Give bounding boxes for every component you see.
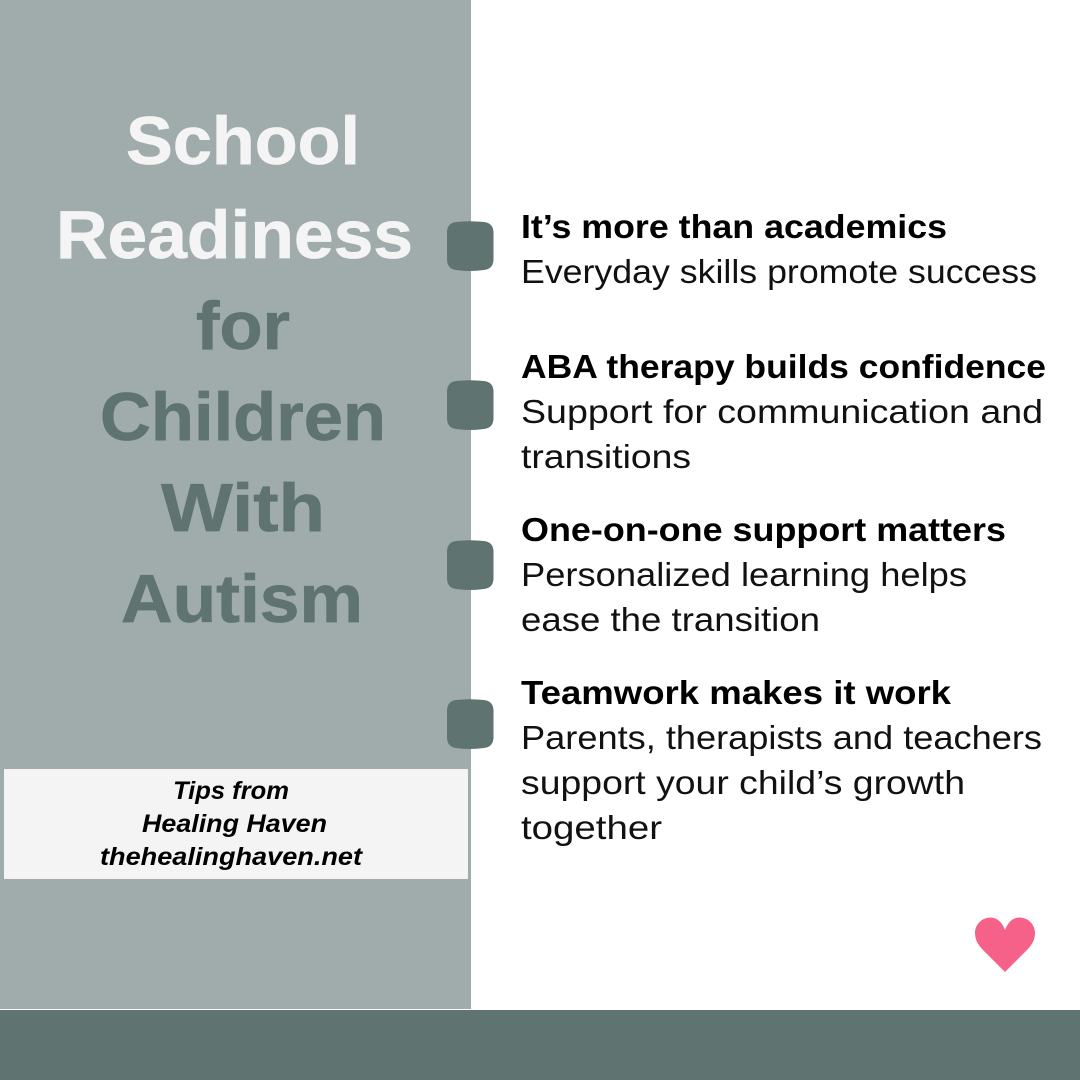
footer band bbox=[0, 1010, 1080, 1080]
title: School bbox=[126, 103, 360, 179]
item 4 bbox=[521, 674, 1042, 846]
item 4: support your child’s growth bbox=[521, 764, 965, 801]
item 2: transitions bbox=[521, 438, 691, 475]
item 2 bbox=[521, 348, 1046, 475]
title: Readiness bbox=[56, 197, 413, 273]
title bbox=[56, 103, 413, 637]
item 3: ease the transition bbox=[521, 601, 820, 638]
callout: tips from Healing Haven bbox=[4, 769, 468, 879]
panel: left sidebar bbox=[0, 0, 471, 1009]
callout: tips from Healing Haven: Healing Haven bbox=[142, 810, 327, 838]
item 3 bbox=[521, 511, 1006, 638]
callout: tips from Healing Haven: thehealinghaven.net bbox=[100, 843, 364, 871]
item 1: Everyday skills promote success bbox=[521, 253, 1037, 290]
item 4: together bbox=[521, 809, 662, 846]
item 3: Personalized learning helps bbox=[521, 556, 967, 593]
icon: bullet 2 bbox=[447, 380, 494, 430]
icon: bullet 3 bbox=[447, 540, 494, 590]
title: for bbox=[196, 288, 290, 364]
item 2: Support for communication and bbox=[521, 393, 1043, 430]
icon: heart bbox=[975, 918, 1035, 972]
item 4: Parents, therapists and teachers bbox=[521, 719, 1042, 756]
title: Children bbox=[100, 379, 386, 455]
icon: bullet 1 bbox=[447, 221, 494, 271]
title: Autism bbox=[121, 561, 363, 637]
item 3: One-on-one support matters bbox=[521, 511, 1006, 548]
title: With bbox=[161, 470, 325, 546]
item 4: Teamwork makes it work bbox=[521, 674, 952, 711]
item 1: It’s more than academics bbox=[521, 208, 947, 245]
item 1 bbox=[521, 208, 1037, 290]
icon: bullet 4 bbox=[447, 699, 494, 749]
callout: tips from Healing Haven: Tips from bbox=[173, 777, 289, 805]
item 2: ABA therapy builds confidence bbox=[521, 348, 1046, 385]
